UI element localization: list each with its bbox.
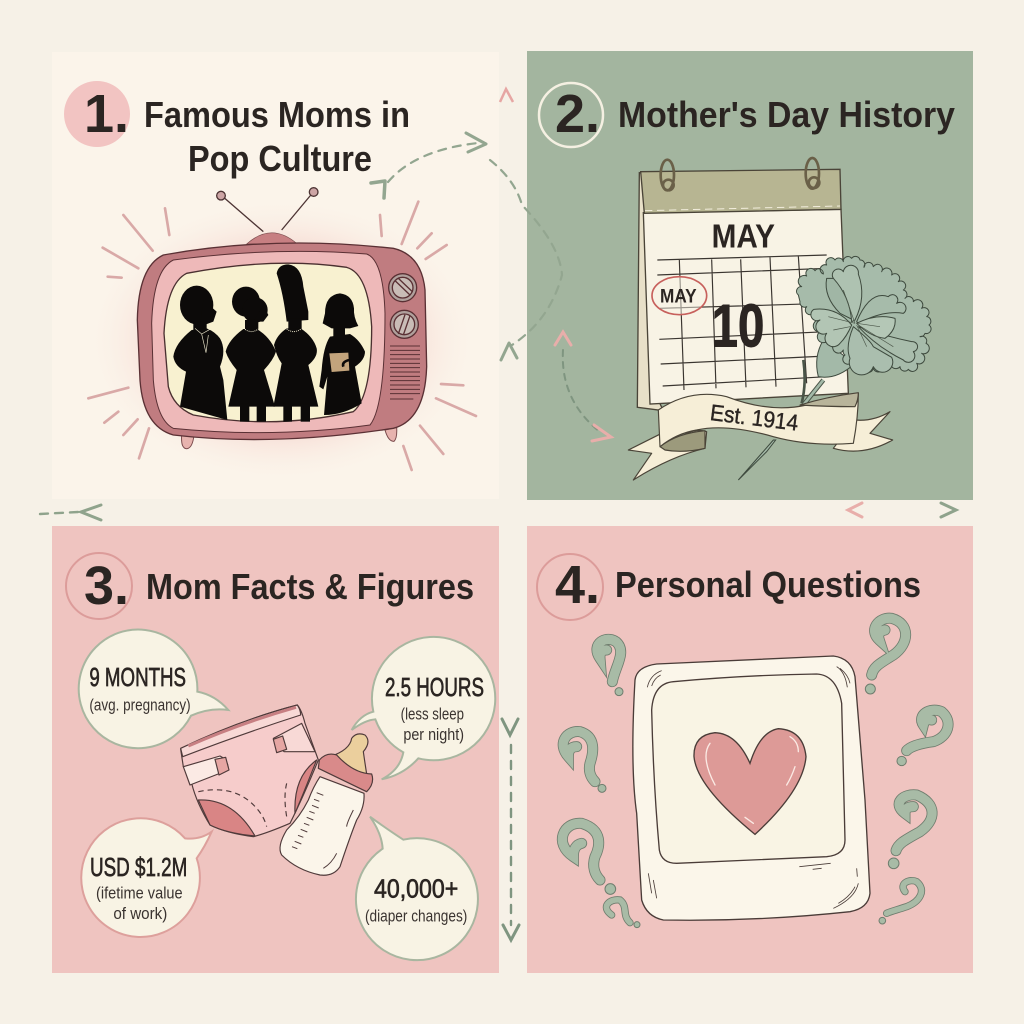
icon: calendar with carnation and ribbon — [628, 158, 931, 480]
panel: personal questions — [527, 526, 973, 973]
panel: mother's day history — [527, 51, 973, 500]
heading 1: Famous Moms in — [144, 94, 410, 135]
heading 4: Personal Questions — [615, 564, 921, 605]
stat bubble: lifetime value: (ifetime value — [96, 883, 183, 902]
stat bubble: 2.5 hours: (less sleep — [401, 704, 464, 723]
stat bubble: lifetime value: USD $1.2M — [90, 852, 187, 882]
number badge 1 — [64, 81, 130, 147]
panel: mom facts and figures — [52, 526, 499, 973]
arrow: vertical dashed between panels 3 and 4 — [502, 719, 519, 940]
icon: calendar with carnation and ribbon: MAY — [660, 287, 697, 308]
arrow: famous moms to history — [371, 133, 562, 360]
heading 2: Mother's Day History — [618, 94, 955, 135]
icon: polaroid frame — [633, 656, 870, 920]
icon: calendar with carnation and ribbon: MAY — [712, 219, 775, 256]
stat bubble: lifetime value — [81, 818, 212, 937]
stat bubble: 9 months: (avg. pregnancy) — [89, 696, 191, 715]
stat bubble: 2.5 hours — [352, 637, 495, 779]
heading 1: Pop Culture — [188, 138, 372, 179]
carnation — [797, 256, 931, 377]
number badge 4: 4. — [555, 555, 600, 615]
panel: famous moms in pop culture — [52, 52, 499, 499]
icon: diaper — [181, 705, 318, 837]
arrow: dashed left from panel 1 to panel 3 — [40, 505, 101, 520]
heading 1 — [144, 94, 410, 179]
stat bubble: 9 months: 9 MONTHS — [89, 662, 186, 692]
icon: question marks — [562, 618, 948, 928]
icon: heart — [694, 729, 806, 834]
arrow: pink dashed path on history panel — [555, 332, 611, 441]
stat bubble: 2.5 hours: 2.5 HOURS — [385, 672, 484, 702]
stat bubble: 9 months — [79, 630, 228, 748]
arrow: chevrons between panels 2 and 4 — [848, 503, 956, 517]
number badge 3: 3. — [84, 556, 129, 616]
stat bubble: lifetime value: of work) — [113, 904, 167, 923]
number badge 2 — [539, 83, 603, 147]
icon: calendar with carnation and ribbon: Est. 1914 — [709, 399, 800, 436]
icon: calendar with carnation and ribbon: 10 — [712, 293, 764, 360]
arrow: pink chevron top — [500, 89, 513, 102]
ribbon — [628, 393, 893, 480]
stat bubble: 2.5 hours: per night) — [403, 725, 464, 744]
stat bubble: diaper changes: (diaper changes) — [365, 907, 467, 926]
icon: baby bottle — [280, 734, 373, 875]
number badge 4 — [537, 554, 603, 620]
stat bubble: diaper changes — [356, 817, 478, 960]
number badge 1: 1. — [84, 84, 129, 144]
number badge 2: 2. — [555, 84, 600, 144]
number badge 3 — [66, 553, 132, 619]
stat bubble: diaper changes: 40,000+ — [374, 873, 458, 903]
heading 3: Mom Facts & Figures — [146, 566, 474, 607]
icon: retro television with silhouettes — [85, 188, 478, 483]
